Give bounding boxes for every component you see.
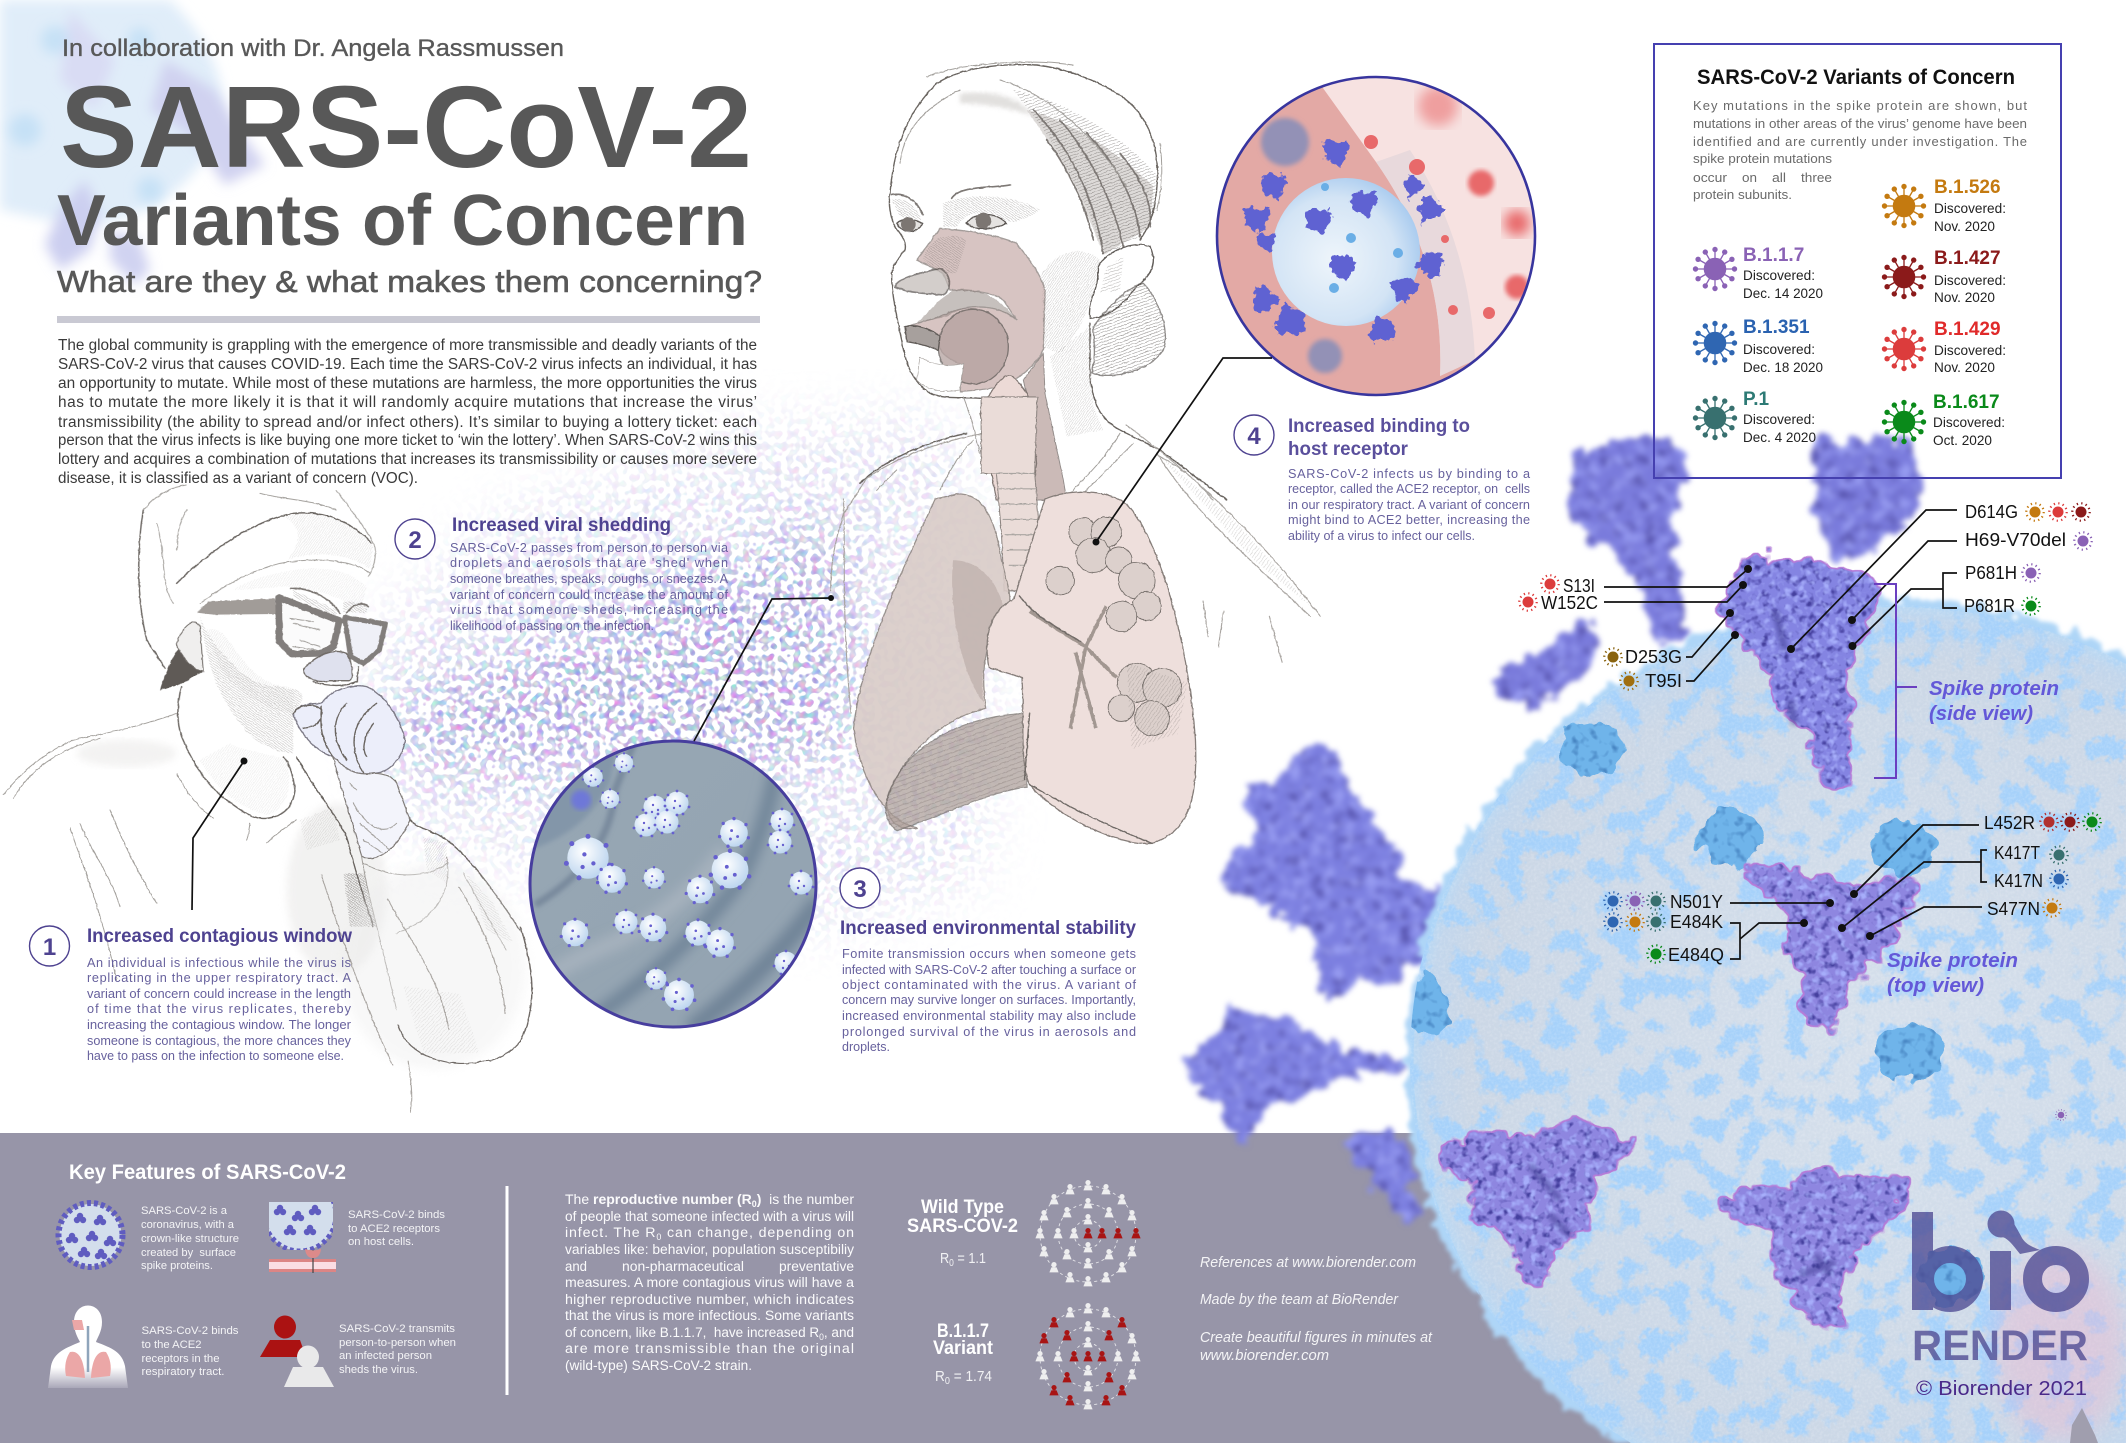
body 3: concern may survive longer on surfaces. Importantly,	[842, 993, 1136, 1007]
variant label	[933, 1321, 994, 1387]
callout 4: host receptor binding	[1092, 358, 1531, 546]
key text 1: crown-like structure	[141, 1233, 239, 1245]
body 2: likelihood of passing on the infection.	[450, 619, 654, 633]
label T95I	[1620, 671, 1682, 691]
caption top view: Spike protein	[1887, 950, 2018, 972]
label S13I: S13I	[1563, 576, 1595, 596]
intro paragraph: disease, it is classified as a variant of concern (VOC).	[58, 470, 418, 487]
body 1: have to pass on the infection to someone else.	[87, 1049, 344, 1063]
key text 2	[348, 1209, 446, 1248]
body 4: ability of a virus to infect our cells.	[1288, 529, 1475, 543]
label E484Q: E484Q	[1668, 945, 1724, 965]
label T95I: T95I	[1645, 671, 1682, 691]
label D253G: D253G	[1625, 647, 1682, 667]
illustration: man coughing	[3, 485, 532, 1112]
illustration: woman with respiratory tract and lungs	[831, 62, 1320, 844]
reproductive number paragraph: measures. A more contagious virus will have a	[565, 1275, 854, 1291]
heading 4	[1288, 416, 1470, 460]
BioRender logo	[1912, 1210, 2088, 1400]
label S13I	[1541, 575, 1595, 596]
title: SARS-CoV-2	[60, 62, 752, 192]
intro paragraph: an opportunity to mutate. While most of these mutations are harmless, the more opportunities the virus	[58, 375, 757, 392]
body 3: prolonged survival of the virus in aerosols and	[842, 1025, 1136, 1039]
label L452R	[1984, 813, 2101, 833]
inset circle: virus on surface	[528, 740, 818, 1028]
footer credits: Made by the team at BioRender	[1200, 1291, 1399, 1308]
label W152C	[1519, 593, 1598, 613]
body 1: someone is contagious, the more chances they	[87, 1034, 352, 1048]
body 4: in our respiratory tract. A variant of concern	[1288, 498, 1530, 512]
copyright: © Biorender 2021	[1916, 1378, 2087, 1400]
key text 3: respiratory tract.	[142, 1366, 224, 1378]
sphere body	[1413, 607, 2126, 1443]
legend description: all	[1772, 170, 1786, 185]
logo mark	[1912, 1210, 2080, 1310]
variant B.1.617: Oct. 2020	[1933, 433, 1992, 448]
icon: coronavirus sphere	[58, 1203, 122, 1267]
key text 3: to the ACE2	[142, 1339, 202, 1351]
reproductive number paragraph: 0	[656, 1232, 661, 1242]
label E484K	[1604, 912, 1723, 932]
footer credits: References at www.biorender.com	[1200, 1254, 1416, 1271]
intro paragraph: lottery and acquires a combination of mutations that increases its transmissibility or causes more severe	[58, 451, 757, 468]
footer credits: www.biorender.com	[1200, 1347, 1329, 1364]
heading 1: Increased contagious window	[87, 926, 352, 947]
tiny purple virus	[2056, 1110, 2066, 1120]
sphere rim	[1405, 599, 2126, 1443]
icon: person to person transmission	[260, 1316, 334, 1387]
legend description: occur	[1693, 170, 1728, 185]
foreground spikes	[1437, 550, 1921, 1334]
body 3: increased environmental stability may also include	[842, 1009, 1136, 1023]
variant label: R	[935, 1368, 946, 1385]
variant B.1.526: B.1.526	[1934, 177, 2001, 198]
key text 4: sheds the virus.	[339, 1364, 418, 1376]
reproductive number paragraph: (wild-type) SARS-CoV-2 strain.	[565, 1358, 752, 1374]
woman head	[860, 62, 1227, 500]
woman torso and lungs	[831, 397, 1320, 844]
label E484K: E484K	[1670, 912, 1723, 932]
body 2: SARS-CoV-2 passes from person to person via	[450, 541, 729, 555]
body 1: of time that the virus replicates, thereby	[87, 1002, 352, 1016]
body 3: infected with SARS-CoV-2 after touching a surface or	[842, 963, 1137, 977]
key text 2: on host cells.	[348, 1236, 414, 1248]
intro paragraph: transmissibility (the ability to spread and/or infect others). It’s similar to buying a lottery ticket: each	[58, 414, 757, 431]
legend description: identified and are currently under investigation. The	[1693, 134, 2027, 149]
legend description: protein subunits.	[1693, 187, 1792, 202]
key text 1: SARS-CoV-2 is a	[141, 1205, 228, 1217]
heading 2: Increased viral shedding	[452, 515, 671, 536]
footer credits: Create beautiful figures in minutes at	[1200, 1329, 1433, 1346]
variant B.1.526: Nov. 2020	[1934, 219, 1995, 234]
label D614G: D614G	[1965, 502, 2018, 522]
callout 2: viral shedding	[395, 515, 729, 633]
body 1	[87, 956, 352, 1063]
body 1: replicating in the upper respiratory tract. A	[87, 971, 352, 985]
callout 4: host receptor binding: 4	[1247, 423, 1261, 450]
variant P.1: Dec. 4 2020	[1743, 430, 1816, 445]
key text 2: to ACE2 receptors	[348, 1223, 441, 1235]
legend description: spike protein mutations	[1693, 151, 1833, 166]
body 4	[1288, 467, 1531, 543]
reproductive number paragraph: The reproductive number (R	[565, 1192, 754, 1208]
body 4: SARS-CoV-2 infects us by binding to a	[1288, 467, 1531, 481]
caption top view: (top view)	[1887, 975, 1984, 997]
panel: key features	[48, 1161, 456, 1388]
key text 3	[142, 1325, 239, 1378]
heading 4: Increased binding to	[1288, 416, 1470, 437]
heading 3: Increased environmental stability	[840, 918, 1136, 939]
key text 4: SARS-CoV-2 transmits	[339, 1323, 456, 1335]
variant B.1.429: Nov. 2020	[1934, 360, 1995, 375]
reproductive number paragraph: non-pharmaceutical	[622, 1259, 744, 1275]
reproductive number paragraph: that the virus is more infectious. Some variants	[565, 1308, 854, 1324]
reproductive number paragraph: is the number	[769, 1192, 855, 1208]
reproductive number paragraph: higher reproductive number, which indicates	[565, 1292, 854, 1308]
spike protein side view mutation labels	[1519, 502, 2092, 778]
footer credits	[1200, 1254, 1433, 1364]
callout 1: contagious window: 1	[43, 934, 56, 961]
variant B.1.526: Discovered:	[1934, 201, 2006, 216]
bottom band	[0, 1133, 2126, 1443]
legend description: mutations in other areas of the virus’ genome have been	[1693, 116, 2027, 131]
variant B.1.617: Discovered:	[1933, 415, 2005, 430]
header	[57, 35, 762, 299]
legend description	[1693, 98, 2027, 202]
variant B.1.351: B.1.351	[1743, 317, 1810, 338]
key text 2: SARS-CoV-2 binds	[348, 1209, 446, 1221]
inset circle: virus binding to host cell	[1210, 70, 1540, 400]
key text 1: spike proteins.	[141, 1260, 213, 1272]
wild type label: SARS-COV-2	[907, 1216, 1018, 1237]
body 1: variant of concern could increase in the length	[87, 987, 351, 1001]
label H69-V70del: H69-V70del	[1965, 530, 2066, 550]
variant label: Variant	[933, 1338, 994, 1359]
variant B.1.1.7: Dec. 14 2020	[1743, 286, 1823, 301]
label S477N: S477N	[1987, 899, 2040, 919]
body 3: droplets.	[842, 1040, 890, 1054]
body 3: object contaminated with the virus. A variant of	[842, 978, 1136, 992]
variant B.1.427	[1882, 248, 2006, 305]
variant B.1.427: Nov. 2020	[1934, 290, 1995, 305]
label L452R: L452R	[1984, 813, 2035, 833]
key text 1: created by surface	[141, 1247, 236, 1259]
background spikes	[1185, 437, 2126, 1443]
body 1: increasing the contagious window. The longer	[87, 1018, 352, 1032]
body 3	[842, 947, 1137, 1054]
label K417N: K417N	[1994, 871, 2043, 891]
key text 1: coronavirus, with a	[141, 1219, 235, 1231]
icon: human respiratory tract	[48, 1306, 128, 1388]
variant B.1.429: B.1.429	[1934, 319, 2001, 340]
reproductive number paragraph: variables like: behavior, population susceptibiliy	[565, 1242, 855, 1258]
wild type label: = 1.1	[954, 1250, 986, 1267]
key text 4: person-to-person when	[339, 1337, 456, 1349]
caption side view: (side view)	[1929, 703, 2033, 725]
panel: variants of concern legend	[1654, 44, 2061, 478]
spike creases	[1530, 610, 1835, 1275]
callout 3: environmental stability: 3	[853, 876, 867, 903]
surface proteins	[1400, 600, 2126, 1443]
reproductive number paragraph	[565, 1192, 855, 1374]
variant B.1.427: Discovered:	[1934, 273, 2006, 288]
key text 3: receptors in the	[142, 1353, 220, 1365]
callout 1: contagious window	[30, 758, 352, 1063]
intro paragraph: has to mutate the more likely it is that it will randomly acquire mutations that increase the virus’	[58, 394, 757, 411]
arrow: droplets to surface circle	[694, 595, 834, 741]
large coronavirus render	[1185, 437, 2126, 1443]
variant B.1.617: B.1.617	[1933, 392, 2000, 413]
label P681R: P681R	[1964, 596, 2015, 616]
wild type label: Wild Type	[921, 1197, 1004, 1218]
key text 3: SARS-CoV-2 binds	[142, 1325, 239, 1337]
wild type label	[907, 1197, 1018, 1269]
reproductive number paragraph: )	[757, 1192, 762, 1208]
body 2: droplets and aerosols that are 'shed' when	[450, 556, 728, 570]
logo wordmark: RENDER	[1912, 1322, 2088, 1370]
body 4: might bind to ACE2 better, increasing the	[1288, 513, 1530, 527]
label P681H: P681H	[1965, 563, 2017, 583]
variant B.1.429	[1882, 319, 2006, 375]
collaboration line: In collaboration with Dr. Angela Rassmussen	[62, 35, 564, 62]
legend description: on	[1742, 170, 1757, 185]
label N501Y: N501Y	[1670, 892, 1723, 912]
reproductive number paragraph: infect. The R	[565, 1225, 655, 1241]
subtitle: Variants of Concern	[57, 181, 748, 261]
key text 1	[141, 1205, 239, 1272]
variant label: B.1.1.7	[937, 1321, 989, 1342]
callout 2: viral shedding: 2	[408, 527, 422, 554]
key text 4: an infected person	[339, 1350, 432, 1362]
reproductive number paragraph: are more transmissible than the original	[565, 1341, 854, 1357]
variant B.1.351: Discovered:	[1743, 342, 1815, 357]
label D614G	[1965, 502, 2090, 522]
variant B.1.429: Discovered:	[1934, 343, 2006, 358]
variant label: 0	[945, 1376, 950, 1387]
spike protein top view mutation labels	[1604, 813, 2101, 997]
body 2: someone breathes, speaks, coughs or sneezes. A	[450, 572, 729, 586]
body 3: Fomite transmission occurs when someone gets	[842, 947, 1136, 961]
label N501Y	[1604, 892, 1723, 912]
legend description: Key mutations in the spike protein are shown, but	[1693, 98, 2027, 113]
variant B.1.1.7: B.1.1.7	[1743, 245, 1804, 266]
reproductive number paragraph: 0	[819, 1332, 824, 1342]
intro paragraph: The global community is grappling with the emergence of more transmissible and deadly variants of the	[58, 337, 757, 354]
reproductive number paragraph: preventative	[779, 1259, 854, 1275]
label K417T: K417T	[1994, 843, 2040, 863]
corner band notch	[2070, 1408, 2098, 1443]
key text 4	[339, 1323, 456, 1376]
intro paragraph: person that the virus infects is like buying one more ticket to ‘win the lottery’. When SARS-CoV-2 wins this	[58, 432, 757, 449]
heading 4: host receptor	[1288, 439, 1409, 460]
bracket side view	[1874, 584, 1917, 778]
callout 3: environmental stability	[840, 868, 1137, 1054]
reproductive number paragraph: of concern, like B.1.1.7, have increased R	[565, 1325, 832, 1341]
variant P.1	[1693, 389, 1816, 445]
intro paragraph: SARS-CoV-2 virus that causes COVID-19. Each time the SARS-CoV-2 virus infects an individual, it has	[58, 356, 757, 373]
variant B.1.427: B.1.427	[1934, 248, 2001, 269]
droplet cloud from cough	[370, 420, 1000, 930]
variant B.1.351: Dec. 18 2020	[1743, 360, 1823, 375]
intro paragraph	[58, 337, 757, 487]
icon: virus binding receptor	[269, 1202, 336, 1273]
caption side view: Spike protein	[1929, 678, 2059, 700]
legend description: three	[1801, 170, 1832, 185]
variant P.1: Discovered:	[1743, 412, 1815, 427]
legend title: SARS-CoV-2 Variants of Concern	[1697, 66, 2015, 89]
variant B.1.351	[1693, 317, 1823, 375]
label K417T	[1994, 843, 2068, 864]
body 2: virus that someone sheds, increasing the	[450, 603, 728, 617]
reproductive number paragraph: 0	[752, 1199, 757, 1209]
diagram: B.1.1.7 transmission rings	[1035, 1303, 1141, 1409]
variant label: = 1.74	[950, 1368, 992, 1385]
variant B.1.617	[1882, 392, 2005, 448]
key features heading: Key Features of SARS-CoV-2	[69, 1161, 346, 1184]
background virus top-left	[0, 0, 265, 285]
variant B.1.1.7	[1693, 245, 1823, 301]
body 2: variant of concern could increase the amount of	[450, 588, 728, 602]
label W152C: W152C	[1541, 593, 1598, 613]
body 4: receptor, called the ACE2 receptor, on cells	[1288, 482, 1530, 496]
body 1: An individual is infectious while the virus is	[87, 956, 351, 970]
wild type label: R	[940, 1250, 951, 1267]
variant B.1.1.7: Discovered:	[1743, 268, 1815, 283]
reproductive number paragraph: can change, depending on	[662, 1225, 854, 1241]
body 2	[450, 541, 729, 633]
caption side view	[1929, 678, 2059, 725]
reproductive number paragraph: and	[565, 1259, 587, 1275]
reproductive number paragraph: , and	[824, 1325, 854, 1341]
reproductive number paragraph: of people that someone infected with a virus will	[565, 1209, 854, 1225]
caption top view	[1887, 950, 2018, 997]
variant B.1.526	[1882, 177, 2006, 234]
diagram: wild type transmission rings	[1035, 1180, 1141, 1286]
wild type label: 0	[949, 1258, 954, 1269]
variant P.1: P.1	[1743, 389, 1770, 410]
question heading: What are they & what makes them concerning?	[57, 264, 762, 299]
